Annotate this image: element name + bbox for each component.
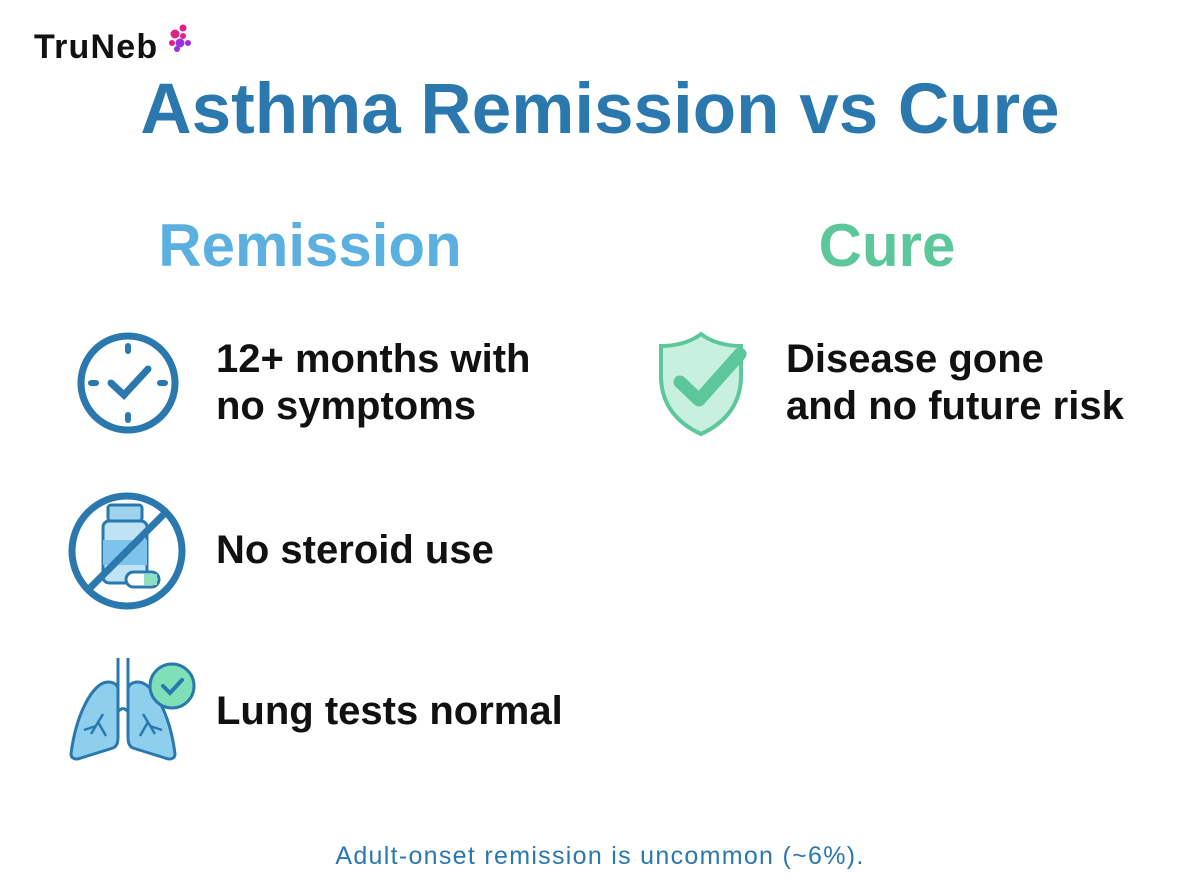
text: no steroid: No steroid use [216,528,494,572]
text: disease gone [786,337,1124,428]
footer note: Adult-onset remission is uncommon (~6%). [335,842,865,870]
heading: Cure: Cure [819,212,955,279]
text: disease gone: Disease gone [786,337,1044,381]
icon: lungs [70,658,196,760]
title: Asthma Remission vs Cure [140,70,1060,149]
icon: shield check [659,332,746,436]
logo: TruNeb [34,28,158,66]
text: lung tests: Lung tests normal [216,689,563,733]
text: 12+ months: 12+ months with [216,337,530,381]
heading: Remission: Remission [158,212,462,279]
text: 12+ months: no symptoms [216,384,476,428]
text: 12+ months [216,337,530,428]
text: disease gone: and no future risk [786,384,1124,428]
icon: clock [78,332,178,434]
icon: no steroid [68,492,186,610]
